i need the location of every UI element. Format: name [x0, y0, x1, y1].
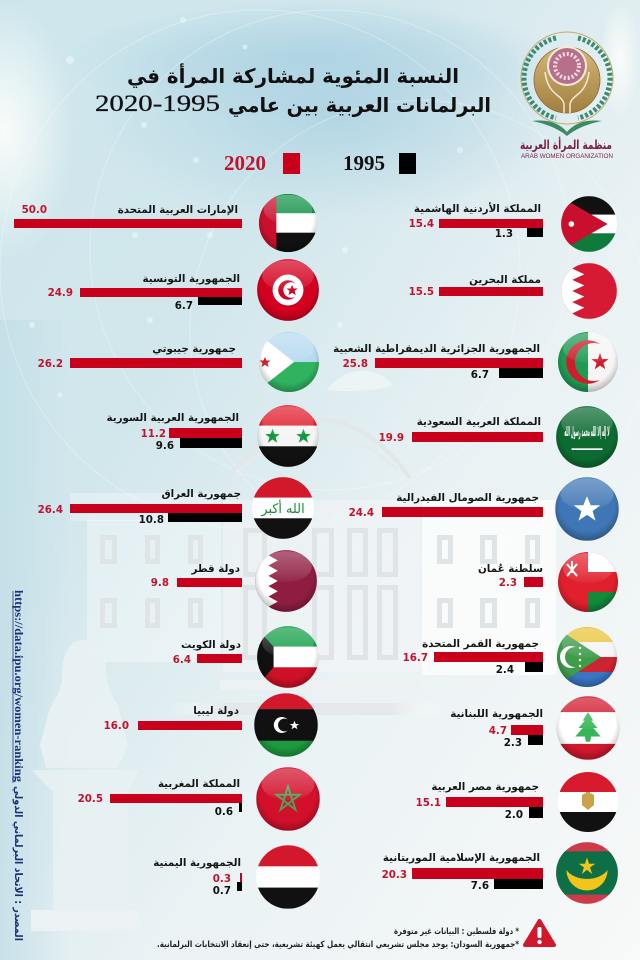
row: Libya: دولة ليبيا	[193, 705, 239, 717]
row: Iraq: جمهورية العراق	[161, 488, 241, 500]
legend: 2020	[224, 151, 266, 175]
row: Qatar	[151, 550, 317, 612]
row: Syria	[107, 405, 319, 467]
row: Syria: الجمهورية العربية السورية	[107, 412, 239, 424]
logo: Arab Women Organization: ARAB WOMEN ORGANIZATION	[521, 153, 613, 160]
row: Bahrain: 15.5	[409, 286, 434, 298]
legend: 1995	[343, 151, 385, 175]
row: Jordan: 1.3	[495, 228, 513, 240]
row: UAE: الإمارات العربية المتحدة	[118, 204, 238, 216]
row: Morocco: المملكة المغربية	[158, 778, 240, 790]
row: Yemen	[153, 845, 320, 909]
row: Egypt: 15.1	[416, 797, 441, 809]
row: Iraq: 10.8	[139, 514, 164, 526]
row: Saudi Arabia: المملكة العربية السعودية	[417, 416, 541, 428]
row: Egypt: 2.0	[505, 809, 523, 821]
row: Jordan: المملكة الأردنية الهاشمية	[414, 202, 541, 215]
row: Tunisia: 24.9	[48, 287, 73, 299]
row: Kuwait: دولة الكويت	[181, 639, 241, 651]
row: Qatar: 9.8	[151, 577, 169, 589]
icon: warning triangle	[525, 921, 554, 945]
row: Syria: 11.2	[141, 428, 166, 440]
row: Libya	[104, 693, 318, 757]
title: البرلمانات العربية بين عامي	[228, 93, 491, 118]
row: Syria: 9.6	[156, 440, 174, 452]
row: Saudi Arabia	[379, 406, 618, 468]
footnotes: * دولة فلسطين : البيانات غير متوفرة	[394, 927, 519, 937]
row: Bahrain	[409, 263, 617, 319]
row: Iraq	[38, 477, 314, 539]
legend	[224, 151, 416, 175]
row: Oman: سلطنة عُمان	[478, 563, 543, 575]
row: Lebanon	[450, 696, 620, 760]
title	[95, 62, 491, 118]
row: Egypt: جمهورية مصر العربية	[431, 781, 539, 793]
row: Oman: 2.3	[499, 577, 517, 589]
row: Djibouti: جمهورية جيبوتي	[152, 343, 236, 355]
row: Kuwait: 6.4	[173, 654, 191, 666]
parliament building watermark	[70, 371, 556, 715]
row: Lebanon: 2.3	[504, 737, 522, 749]
row: Libya: 16.0	[104, 720, 129, 732]
row: Algeria	[333, 332, 618, 392]
source text (vertical): المصدر : الاتحاد البرلماني الدولي	[12, 786, 24, 941]
row: UAE	[14, 194, 317, 252]
statue watermark	[31, 640, 139, 931]
row: Comoros: 2.4	[496, 664, 514, 676]
row: Iraq: 26.4	[38, 504, 63, 516]
row: Algeria: الجمهورية الجزائرية الديمقراطية الشعبية	[333, 343, 540, 355]
row: Lebanon: الجمهورية اللبنانية	[450, 708, 543, 720]
row: Jordan: 15.4	[409, 218, 434, 230]
row: Jordan	[409, 196, 617, 252]
footnotes	[157, 927, 519, 950]
row: Mauritania: 20.3	[382, 869, 407, 881]
row: Djibouti	[38, 332, 319, 392]
row: Yemen: الجمهورية اليمنية	[153, 857, 241, 869]
row: Bahrain: مملكة البحرين	[469, 274, 541, 286]
title: 2020-1995	[95, 91, 220, 116]
row: Yemen: 0.7	[213, 885, 231, 897]
row: Comoros	[403, 627, 617, 687]
row: Somalia: جمهورية الصومال الفيدرالية	[396, 492, 539, 504]
row: Mauritania	[382, 842, 618, 904]
row: Algeria: 6.7	[471, 369, 489, 381]
source text (vertical)	[12, 590, 24, 941]
row: Lebanon: 4.7	[489, 725, 507, 737]
row: Tunisia	[48, 259, 319, 321]
row: Djibouti: 26.2	[38, 358, 63, 370]
row: UAE: 50.0	[22, 204, 47, 216]
row: Iraq: الله أكبر	[260, 499, 305, 517]
title: النسبة المئوية لمشاركة المرأة في	[127, 62, 459, 89]
row: Yemen: 0.3	[213, 873, 231, 885]
source text (vertical): https://data.ipu.org/women-ranking	[12, 590, 24, 782]
row: Qatar: دولة قطر	[190, 563, 240, 575]
row: Morocco: 0.6	[215, 806, 233, 818]
row: Tunisia: الجمهورية التونسية	[143, 273, 240, 285]
row: Mauritania: الجمهورية الإسلامية الموريتانية	[383, 852, 540, 864]
row: Somalia: 24.4	[349, 507, 374, 519]
row: Saudi Arabia: 19.9	[379, 432, 404, 444]
row: Morocco: 20.5	[78, 793, 103, 805]
row: Mauritania: 7.6	[471, 880, 489, 892]
footnotes: *جمهورية السودان: يوجد مجلس تشريعي انتقالي يعمل كهيئة تشريعية، حتى إنعقاد الانتخابات البرلمانية.	[157, 940, 519, 950]
row: Algeria: 25.8	[343, 358, 368, 370]
row: Kuwait	[173, 626, 319, 688]
row: Somalia	[349, 477, 619, 541]
row: Oman	[478, 552, 618, 612]
logo: Arab Women Organization	[520, 32, 613, 160]
row: Egypt	[416, 772, 618, 832]
row: Tunisia: 6.7	[175, 300, 193, 312]
row: Morocco	[78, 767, 320, 831]
row: Comoros: جمهورية القمر المتحدة	[422, 638, 539, 650]
row: Comoros: 16.7	[403, 652, 428, 664]
